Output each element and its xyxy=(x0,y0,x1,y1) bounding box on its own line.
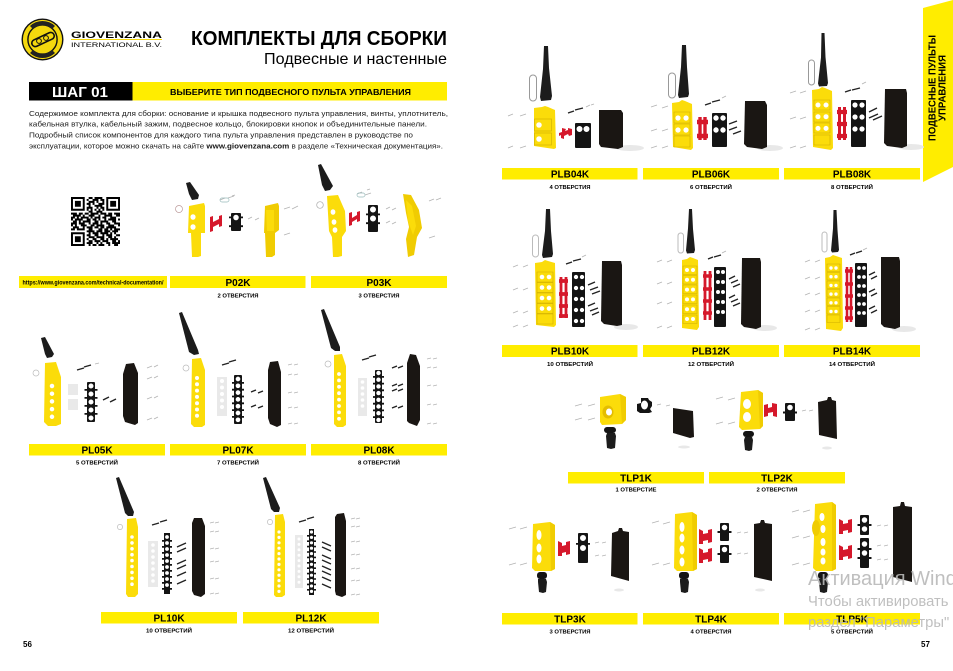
name bar: TLP3K xyxy=(554,614,587,626)
name bar: TLP5K xyxy=(836,614,869,626)
hole count: 6 ОТВЕРСТИЙ xyxy=(690,183,732,191)
product: PL12K xyxy=(243,477,379,634)
product: PLB04K xyxy=(502,46,644,191)
hole count: 8 ОТВЕРСТИЙ xyxy=(358,458,400,466)
name bar: P02K xyxy=(225,278,251,289)
side tab: section title: УПРАВЛЕНИЯ xyxy=(938,55,948,121)
hole count: 1 ОТВЕРСТИЕ xyxy=(616,488,657,494)
name bar: PLB04K xyxy=(551,170,590,180)
watermark: Windows activation: Чтобы активировать xyxy=(808,594,949,610)
hole count: 5 ОТВЕРСТИЙ xyxy=(831,628,873,636)
hole count: 7 ОТВЕРСТИЙ xyxy=(217,458,259,466)
exploded parts xyxy=(317,164,441,257)
product: P02K xyxy=(170,182,306,300)
name bar: PLB08K xyxy=(833,170,872,180)
exploded parts xyxy=(513,209,638,330)
product: PLB06K xyxy=(643,45,783,191)
name bar xyxy=(311,444,447,456)
name bar xyxy=(502,345,638,358)
product: PLB08K xyxy=(784,33,924,191)
name bar: TLP4K xyxy=(695,614,728,626)
exploded parts xyxy=(33,337,158,426)
product: PL07K xyxy=(170,312,306,466)
link bar xyxy=(19,276,167,288)
watermark: Windows activation xyxy=(808,568,953,631)
side tab: section title xyxy=(923,0,953,182)
watermark: Windows activation: раздел "Параметры" xyxy=(808,615,949,631)
link bar: https://www.giovenzana.com/technical-documentation/ xyxy=(22,280,164,286)
product: PLB12K xyxy=(643,209,779,368)
intro text block: Подробный список компонентов для каждого типа пульта управления представлен в руководстве по xyxy=(29,130,413,140)
title: КОМПЛЕКТЫ ДЛЯ СБОРКИ xyxy=(191,28,447,50)
hole count: 2 ОТВЕРСТИЯ xyxy=(218,294,259,300)
page number 57: 57 xyxy=(921,640,930,649)
exploded parts xyxy=(575,394,694,449)
exploded parts xyxy=(792,502,912,593)
product: TLP5K xyxy=(784,502,920,636)
hole count: 4 ОТВЕРСТИЯ xyxy=(550,185,591,191)
name bar: P03K xyxy=(366,278,392,289)
exploded parts xyxy=(651,45,783,151)
exploded parts xyxy=(321,309,437,427)
step header xyxy=(29,82,447,101)
subtitle: Подвесные и настенные xyxy=(264,51,447,68)
product: PL05K xyxy=(29,337,165,466)
step header: ВЫБЕРИТЕ ТИП ПОДВЕСНОГО ПУЛЬТА УПРАВЛЕНИЯ xyxy=(170,87,411,97)
name bar xyxy=(643,168,779,180)
product: TLP2K xyxy=(709,390,845,494)
product: PLB10K xyxy=(502,209,638,368)
name bar xyxy=(784,168,920,180)
intro text block: эксплуатации, которое можно скачать на сайте www.giovenzana.com в разделе «Техническая документация». xyxy=(29,142,443,150)
step header: ШАГ 01 xyxy=(52,84,108,101)
page number 56: 56 xyxy=(23,640,32,649)
hole count: 8 ОТВЕРСТИЙ xyxy=(831,183,873,191)
logo: Giovenzana xyxy=(22,18,64,60)
name bar: PL12K xyxy=(295,614,327,624)
name bar: PL08K xyxy=(363,446,395,456)
name bar: PL10K xyxy=(153,614,185,624)
name bar: PLB10K xyxy=(551,346,590,358)
product: TLP1K xyxy=(568,394,704,494)
hole count: 4 ОТВЕРСТИЯ xyxy=(690,630,732,636)
name bar xyxy=(243,612,379,624)
intro text block: кабельная втулка, кабельный зажим, подвесное кольцо, блокировки кнопок и объединительные панели. xyxy=(29,120,427,128)
brand name: INTERNATIONAL B.V. xyxy=(71,42,162,49)
product: PL10K xyxy=(101,477,237,634)
exploded parts xyxy=(805,210,916,332)
hole count: 5 ОТВЕРСТИЙ xyxy=(76,458,118,466)
product: P03K xyxy=(311,164,447,300)
name bar: TLP2K xyxy=(761,474,794,484)
name bar xyxy=(170,444,306,456)
hole count: 3 ОТВЕРСТИЯ xyxy=(358,294,400,300)
exploded parts xyxy=(509,522,629,593)
name bar: PL05K xyxy=(81,446,113,456)
brand name xyxy=(71,30,162,49)
side tab: section title: ПОДВЕСНЫЕ ПУЛЬТЫ xyxy=(928,35,938,141)
name bar: PLB14K xyxy=(833,346,872,358)
name bar xyxy=(643,345,779,358)
QR code xyxy=(71,197,120,246)
name bar xyxy=(502,168,638,180)
name bar xyxy=(101,612,237,624)
hole count: 2 ОТВЕРСТИЯ xyxy=(756,488,798,494)
hole count: 12 ОТВЕРСТИЙ xyxy=(688,360,734,368)
exploded parts xyxy=(652,512,772,593)
hole count: 12 ОТВЕРСТИЙ xyxy=(288,626,334,634)
brand name: GIOVENZANA xyxy=(71,30,162,41)
name bar: PL07K xyxy=(222,446,254,456)
exploded parts xyxy=(508,46,644,151)
hole count: 3 ОТВЕРСТИЯ xyxy=(550,630,591,636)
exploded parts xyxy=(176,182,298,257)
exploded parts xyxy=(116,477,219,597)
name bar xyxy=(784,345,920,358)
exploded parts xyxy=(716,390,837,451)
exploded parts xyxy=(657,209,777,331)
exploded parts xyxy=(790,33,924,150)
hole count: 10 ОТВЕРСТИЙ xyxy=(547,360,593,368)
product: TLP3K xyxy=(502,522,638,636)
exploded parts xyxy=(263,477,360,597)
name bar: PLB06K xyxy=(692,170,731,180)
intro text block xyxy=(29,109,448,150)
hole count: 14 ОТВЕРСТИЙ xyxy=(829,360,875,368)
product: TLP4K xyxy=(643,512,779,636)
name bar: PLB12K xyxy=(692,346,731,358)
hole count: 10 ОТВЕРСТИЙ xyxy=(146,626,192,634)
intro text block: Содержимое комплекта для сборки: основание и крышка подвесного пульта управления, винты, уплотнитель, xyxy=(29,109,448,118)
name bar: TLP1K xyxy=(620,474,653,484)
product: PLB14K xyxy=(784,210,920,368)
exploded parts xyxy=(179,312,298,427)
product: PL08K xyxy=(311,309,447,466)
